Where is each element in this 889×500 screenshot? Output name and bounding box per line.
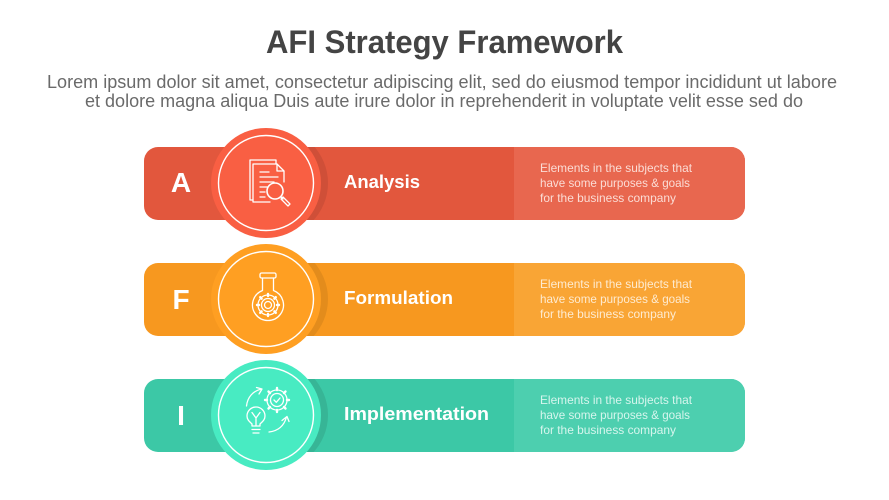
description: Analysis xyxy=(540,161,693,205)
subtitle text xyxy=(47,72,837,111)
bar: Formulation xyxy=(144,263,745,336)
panel: Implementation xyxy=(144,360,745,470)
circle badge: Implementation xyxy=(211,360,321,470)
label: Analysis: Analysis xyxy=(344,172,420,192)
label: Implementation: Implementation xyxy=(344,404,489,424)
description: Implementation: have some purposes & goals xyxy=(540,408,690,422)
description: Analysis: Elements in the subjects that xyxy=(540,161,693,175)
description: Formulation xyxy=(540,277,693,321)
bar: Implementation xyxy=(144,379,745,452)
icon: document with magnifier xyxy=(250,160,290,206)
description: Implementation xyxy=(540,393,693,437)
icon: cycle with gear and light bulb xyxy=(246,388,289,433)
letter F: F xyxy=(172,284,190,315)
infographic canvas xyxy=(48,30,836,470)
description: Analysis: for the business company xyxy=(540,191,676,205)
letter I: I xyxy=(177,400,185,431)
bar: Analysis xyxy=(144,147,745,220)
description: Formulation: have some purposes & goals xyxy=(540,292,690,306)
circle badge: Formulation xyxy=(211,244,321,354)
description: Implementation: Elements in the subjects that xyxy=(540,393,693,407)
label: Formulation: Formulation xyxy=(344,288,453,308)
description: Analysis: have some purposes & goals xyxy=(540,176,690,190)
panel: Analysis xyxy=(144,128,745,238)
panel: Formulation xyxy=(144,244,745,354)
title: AFI Strategy Framework xyxy=(266,24,623,60)
description: Formulation: Elements in the subjects that xyxy=(540,277,693,291)
circle badge: Analysis xyxy=(211,128,321,238)
description: Implementation: for the business company xyxy=(540,423,676,437)
subtitle text: Lorem ipsum dolor sit amet, consectetur adipiscing elit, sed do eiusmod tempor incididunt ut labore xyxy=(47,72,837,92)
letter A: A xyxy=(171,167,191,198)
icon: flask with gear xyxy=(252,273,283,320)
description: Formulation: for the business company xyxy=(540,307,676,321)
subtitle text: et dolore magna aliqua Duis aute irure dolor in reprehenderit in voluptate velit esse sed do xyxy=(85,91,803,111)
